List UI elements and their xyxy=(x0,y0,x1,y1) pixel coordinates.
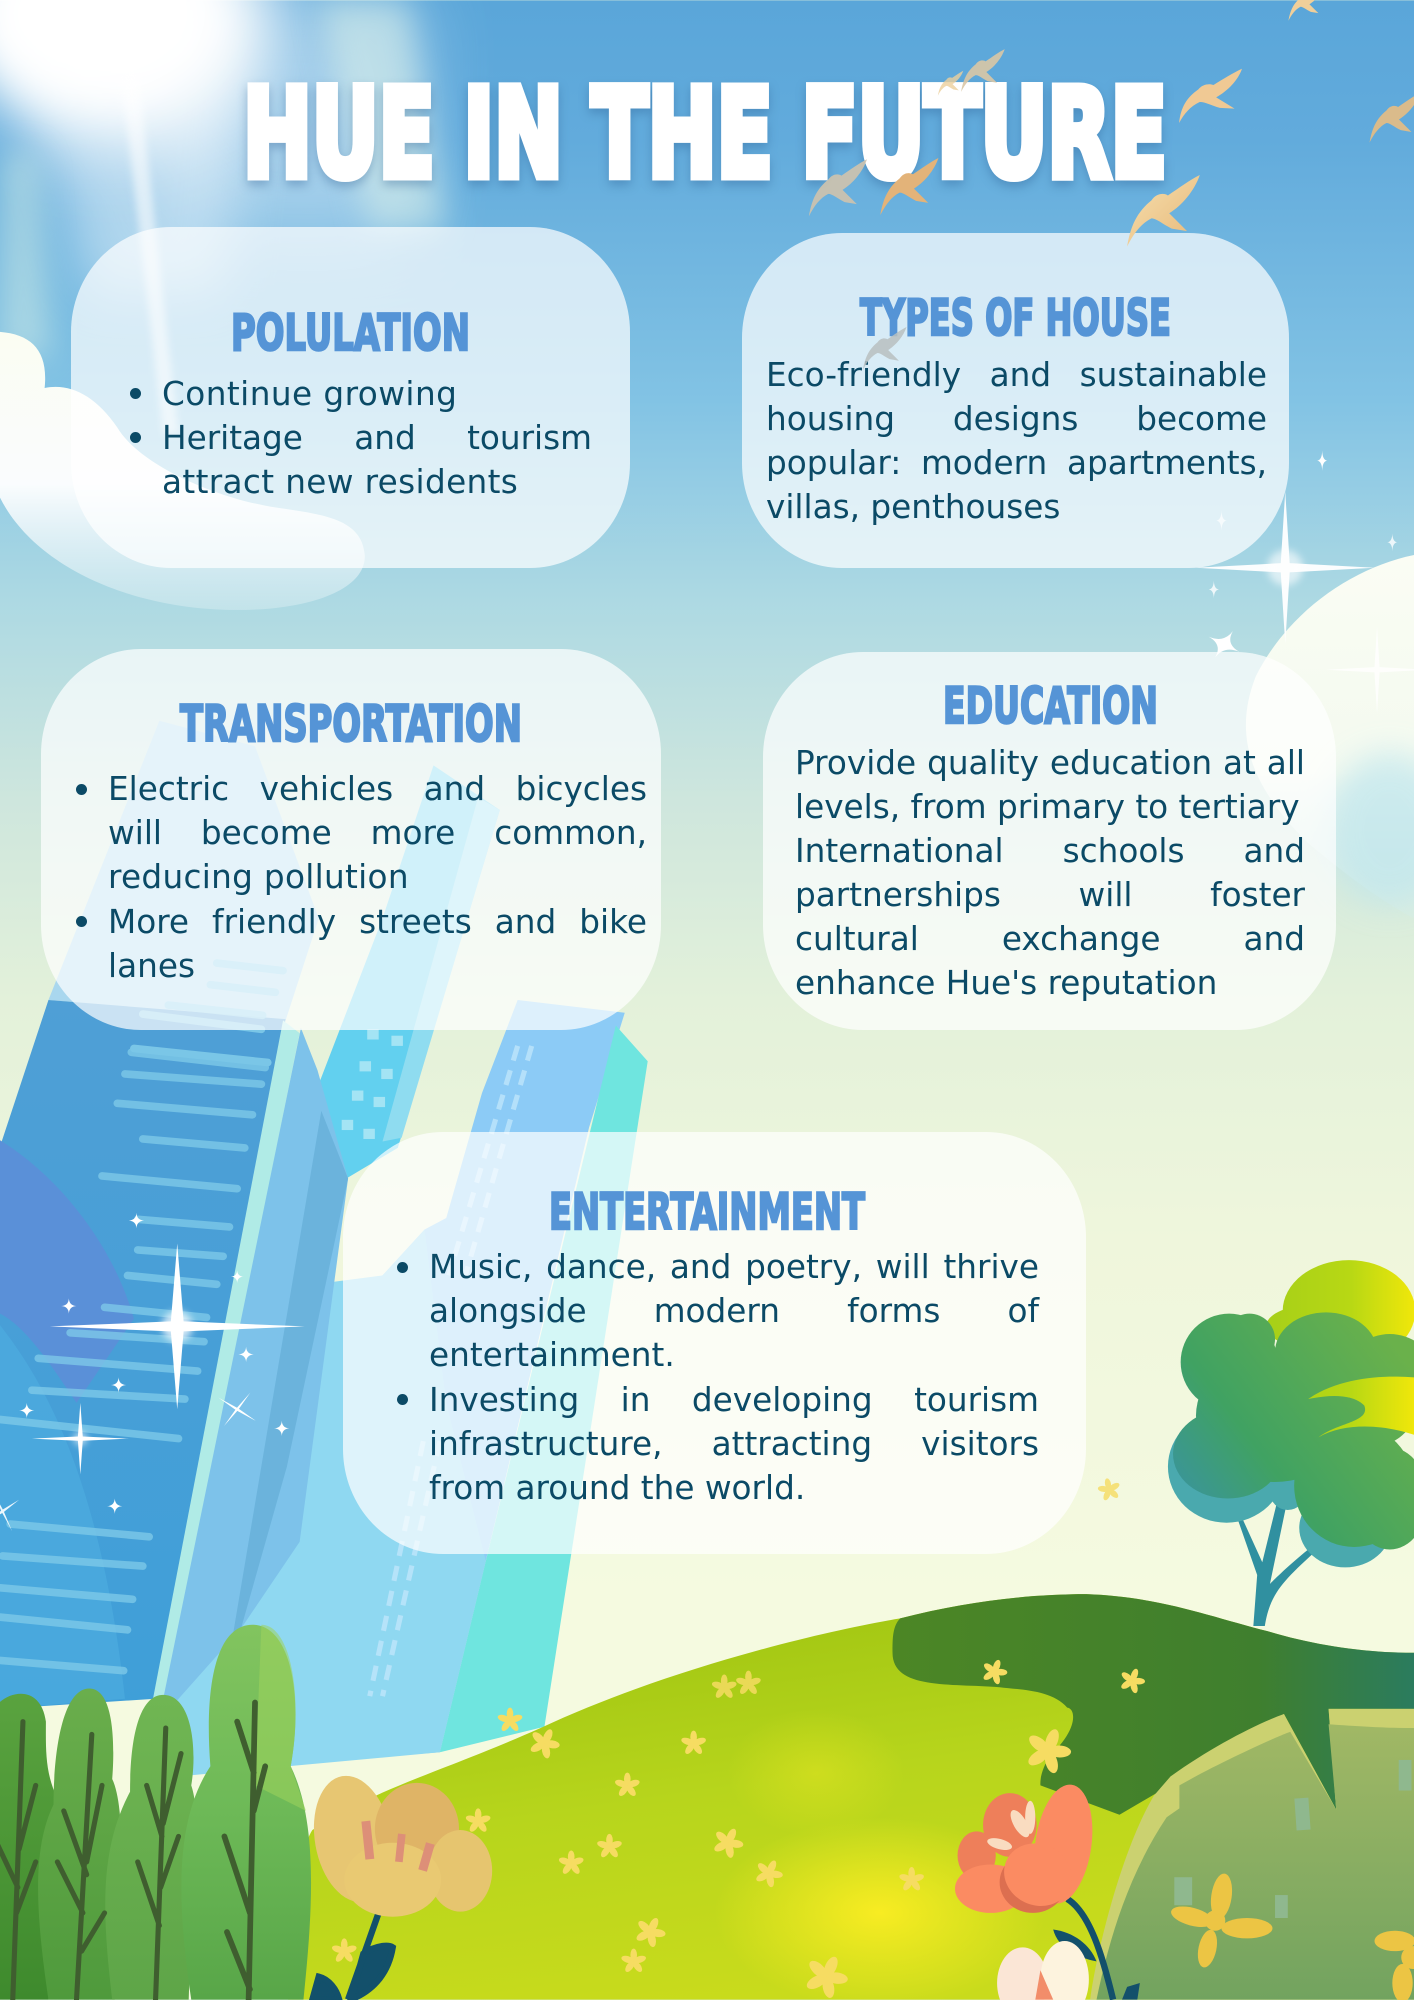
bird xyxy=(880,158,938,215)
text block: education description xyxy=(795,744,1305,1002)
building: front blue tower xyxy=(0,1000,286,1709)
text block: music and dance xyxy=(429,1248,1040,1374)
text block: tourism infrastructure: Investing in developing tourism xyxy=(429,1381,1039,1419)
panel: entertainment xyxy=(343,1132,1086,1554)
text block: housing description: housing designs become xyxy=(766,400,1267,438)
bird xyxy=(1370,93,1414,143)
hill xyxy=(288,1594,1414,2000)
left cloud xyxy=(0,332,365,610)
bullet marker xyxy=(130,432,140,442)
panel: education xyxy=(763,652,1336,1030)
panel: types of house xyxy=(742,233,1289,568)
bird xyxy=(809,159,867,216)
building: window bars xyxy=(0,963,283,1671)
tree 4 xyxy=(181,1625,311,2000)
bullet marker xyxy=(396,1394,408,1404)
text: attract new residents: attract new residents xyxy=(162,463,518,501)
building: far tower dashes xyxy=(370,1046,532,1696)
text block: education description: partnerships will foster xyxy=(795,876,1305,914)
text block: education description: Provide quality education at all xyxy=(795,744,1305,782)
bullet marker xyxy=(130,388,140,398)
text block: electric vehicles: will become more common, xyxy=(108,814,647,852)
heading: transportation: TRANSPORTATION xyxy=(180,695,522,753)
orange tulip stem xyxy=(1067,1899,1113,2000)
right tree xyxy=(1168,1260,1414,1626)
text block: tourism infrastructure: infrastructure, attracting visitors xyxy=(429,1425,1039,1463)
icon: flower on rock xyxy=(1169,1872,1272,1969)
tree 1 xyxy=(0,1694,57,2000)
building: cyan tower xyxy=(319,765,500,1180)
text block: education description: enhance Hue's reputation xyxy=(795,964,1217,1002)
building: bright edge strip xyxy=(153,1020,300,1699)
bird xyxy=(1173,69,1248,123)
text block: friendly streets: lanes xyxy=(108,947,195,985)
left row of trees xyxy=(0,1625,311,2000)
text block: friendly streets: More friendly streets and bike xyxy=(108,903,647,941)
bird xyxy=(863,327,907,370)
building: far tower face xyxy=(277,1000,625,1765)
heading: entertainment: ENTERTAINMENT xyxy=(549,1183,865,1241)
tree teal shadow xyxy=(1168,1411,1391,1567)
orange tulip xyxy=(955,1781,1113,2000)
tulip marks xyxy=(361,1821,435,1872)
small meadow flowers xyxy=(331,1474,1149,2000)
sparkle: building large xyxy=(50,1244,305,1409)
tree 2 xyxy=(38,1689,122,2000)
tree yellow leaf highlight xyxy=(1308,1377,1414,1437)
sparkle: building medium xyxy=(32,1403,129,1474)
white tulip leaf xyxy=(1122,1983,1140,2000)
text block: housing description: popular: modern apartments, xyxy=(766,444,1267,482)
buildings xyxy=(0,721,648,1775)
heading: education: EDUCATION xyxy=(943,677,1158,735)
icon: flower at rock edge xyxy=(1374,1931,1414,2000)
text block: housing description xyxy=(766,356,1267,526)
text: continue growing: Continue growing xyxy=(162,375,457,413)
building: back pale tower xyxy=(48,721,319,1020)
text block: tourism infrastructure xyxy=(429,1381,1039,1507)
tree leaves xyxy=(1173,1312,1414,1550)
right cloud xyxy=(1246,555,1414,918)
bird xyxy=(961,49,1005,92)
bird xyxy=(1127,175,1200,246)
hill: yellow highlight xyxy=(714,1817,1046,2000)
building: teal side xyxy=(440,1026,648,1752)
rock marks xyxy=(1174,1760,1411,1918)
panel: population xyxy=(71,227,630,568)
building: cyan tower windows xyxy=(342,1029,403,1139)
building: mid face xyxy=(163,1028,348,1709)
hill: rock band xyxy=(1090,1709,1414,2000)
tree yellow crown xyxy=(1266,1260,1414,1362)
panel: transportation xyxy=(41,649,661,1030)
bullet marker xyxy=(76,784,86,794)
text block: electric vehicles: Electric vehicles and bicycles xyxy=(108,770,647,808)
hill: dark shaded ridge xyxy=(893,1594,1414,1815)
text block: music and dance: alongside modern forms of xyxy=(429,1292,1039,1330)
heading: population: POLULATION xyxy=(231,304,470,362)
text block: tourism infrastructure: from around the world. xyxy=(429,1469,805,1507)
building: lower light-blue block xyxy=(166,1230,486,1775)
yellow tulip xyxy=(304,1770,492,2000)
text block: education description: International schools and xyxy=(795,832,1305,870)
hill: grass xyxy=(288,1594,1414,2000)
orange tulip white centre xyxy=(986,1801,1035,1852)
text block: housing description: villas, penthouses xyxy=(766,488,1060,526)
right cloud inner shade xyxy=(1326,753,1414,906)
text: heritage and tourism: Heritage and tourism xyxy=(162,419,592,457)
bullet marker xyxy=(396,1262,408,1272)
building: violet shade xyxy=(0,1140,134,1403)
heading: types of house: TYPES OF HOUSE xyxy=(860,289,1171,347)
text block: electric vehicles: reducing pollution xyxy=(108,858,409,896)
text block: housing description: Eco-friendly and sustainable xyxy=(766,356,1267,394)
text block: education description: cultural exchange and xyxy=(795,920,1305,958)
bird xyxy=(1288,0,1325,21)
bird xyxy=(938,71,963,96)
text block: electric vehicles xyxy=(108,770,647,896)
sparkle: top-right large xyxy=(1196,491,1374,644)
hill: rock face xyxy=(1097,1724,1414,2000)
text block: education description: levels, from primary to tertiary xyxy=(795,788,1300,826)
text block: music and dance: entertainment. xyxy=(429,1336,675,1374)
white tulip xyxy=(997,1941,1140,2000)
text block: music and dance: Music, dance, and poetry, will thrive xyxy=(429,1248,1039,1286)
sunlight beams xyxy=(0,0,446,434)
bullet marker xyxy=(76,916,86,926)
tree trunk xyxy=(1238,1492,1313,1626)
sparkles xyxy=(0,450,1414,1543)
tree trunks xyxy=(0,1703,265,2000)
tulip stem and leaf xyxy=(312,1909,393,2000)
tree 3 xyxy=(105,1695,197,2000)
text block: friendly streets xyxy=(108,903,647,985)
